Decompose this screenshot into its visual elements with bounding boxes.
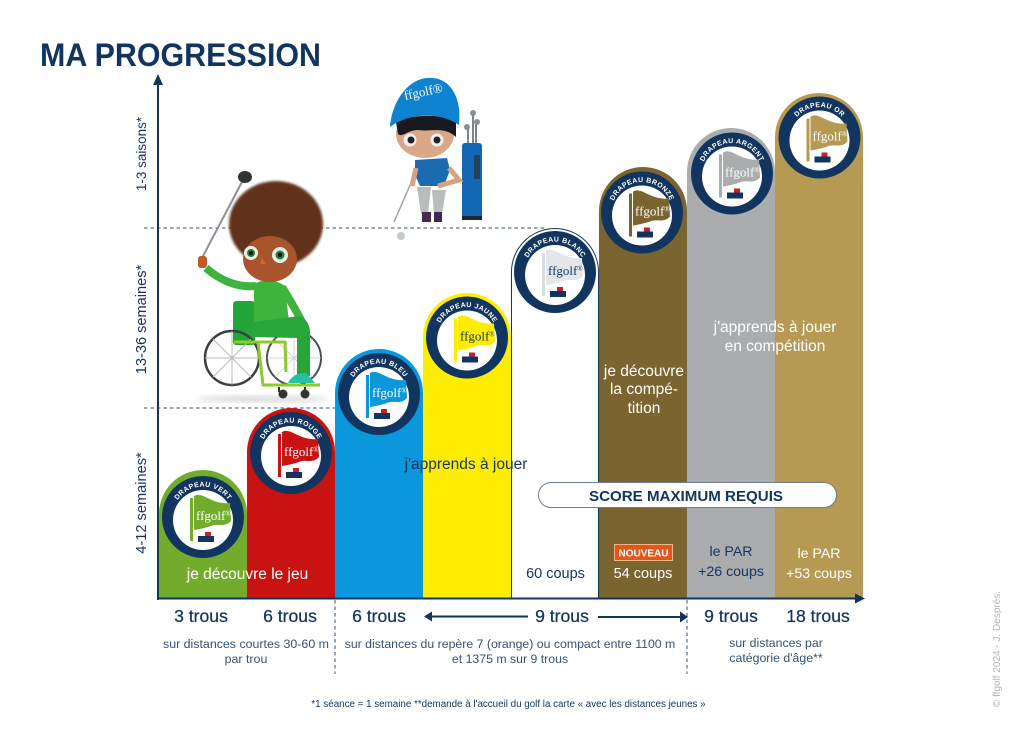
illustration: golfer in wheelchair [196,171,328,402]
ground shadow [196,396,328,402]
torso [415,158,450,186]
badge: drapeau argent [691,132,773,214]
note: distances par âge: sur distances par [729,636,823,650]
back cushion [233,301,255,345]
score: le PAR +26 coups: +26 coups [698,564,764,580]
bar: jaune [423,293,511,598]
holes: 18 trous: 18 trous [786,606,850,626]
badge: drapeau bleu: ® [401,387,407,395]
badge: drapeau rouge [250,412,332,494]
bar: vert [159,470,247,598]
holes: 6 trous: 6 trous [263,606,317,626]
holes: 9 trous with arrows [424,606,688,626]
note: distances repère 7: sur distances du repère 7 (orange) ou compact entre 1100 m [345,637,675,651]
bar: blanc [512,228,598,598]
hair [229,181,323,267]
far wheel [267,331,321,385]
badge: drapeau bronze: ® [664,206,670,214]
bar: bronze [599,167,687,598]
dashed level lines [144,228,687,674]
hand [198,256,207,268]
holes: 6 trous: 6 trous [352,606,406,626]
score: 60 coups: 60 coups [526,566,585,582]
legs [417,187,446,214]
bar: argent [687,128,775,598]
badge: drapeau vert: DRAPEAU VERT [174,482,232,500]
badge: drapeau blanc: ® [577,265,583,273]
club [202,180,243,258]
pill: score maximum requis [538,482,836,508]
badge: drapeau rouge: ffgolf [284,444,313,459]
footnote: *1 séance = 1 semaine **demande à l'accueil du golf la carte « avec les distances jeunes » [311,699,706,710]
badge: drapeau blanc [514,231,596,313]
holes: 9 trous: 9 trous [704,606,758,626]
score: le PAR +53 coups: le PAR [797,546,841,562]
axis label: 4-12 semaines: 4-12 semaines* [134,452,150,554]
note: distances par âge: catégorie d'âge** [729,651,823,665]
chair frame [234,342,320,385]
badge: drapeau or: ffgolf [812,128,842,144]
bar text: je découvre la compétition: la compé- [610,381,678,398]
badge: drapeau jaune: DRAPEAU JAUNE [436,302,498,323]
tag: nouveau [614,544,672,560]
bar text: je découvre la compétition: je découvre [603,363,684,380]
badge: drapeau jaune: ffgolf [460,328,489,344]
holes: 9 trous with arrows: 9 trous [535,606,589,626]
badge: drapeau or: ® [842,130,848,138]
bar: rouge [247,408,335,598]
putter [394,183,411,222]
note: distances courtes: sur distances courtes 30-60 m [163,637,329,651]
badge: drapeau vert: ffgolf [196,508,225,523]
pill: score maximum requis: SCORE MAXIMUM REQUIS [589,488,783,505]
badge: drapeau argent: DRAPEAU ARGENT [700,138,764,162]
badge: drapeau bronze: ffgolf [635,204,664,218]
score: le PAR +53 coups: +53 coups [786,566,852,582]
bar text: j'apprends à jouer en compétition: en compétition [725,338,825,355]
arm raised [206,268,256,286]
face [243,236,297,282]
bar text: j'apprends à jouer en compétition: j'apprends à jouer [713,319,836,336]
bar: bleu [335,349,423,598]
ball [397,232,405,240]
arms [412,168,459,186]
badge: drapeau jaune: ® [489,330,495,338]
note: distances repère 7: et 1375 m sur 9 trous [452,652,568,666]
illustration: golfer with cap and bag [323,78,482,240]
bar text: j'apprends à jouer: j'apprends à jouer [404,456,527,473]
arm right [282,287,302,322]
bar: or [775,93,863,598]
badge: drapeau or: DRAPEAU OR [794,102,844,117]
torso [254,280,289,322]
badge: drapeau jaune [426,296,508,378]
illustration: golfer with cap and bag: ffgolf® [403,80,444,103]
ground shadow [323,220,462,224]
badge: drapeau bleu [338,353,420,435]
badge: drapeau argent: ffgolf [725,164,754,180]
badge: drapeau argent: ® [754,166,760,174]
badge: drapeau bleu: DRAPEAU BLEU [350,358,408,377]
axes [153,74,865,604]
holes: 3 trous: 3 trous [174,606,228,626]
badge: drapeau rouge: ® [313,446,319,454]
title: MA PROGRESSION [40,37,321,73]
score: le PAR +26 coups: le PAR [709,544,753,560]
bar text: je découvre le jeu: je découvre le jeu [186,566,308,583]
badge: drapeau blanc: ffgolf [548,263,577,278]
shoe [288,373,315,383]
badge: drapeau vert [162,476,244,558]
badge: drapeau bronze [601,172,683,254]
score: 54 coups: 54 coups [614,566,672,582]
cap [390,78,460,127]
badge: drapeau bleu: ffgolf [372,385,401,400]
badge: drapeau blanc: DRAPEAU BLANC [524,236,586,258]
badge: drapeau or [778,96,860,178]
badge: drapeau vert: ® [225,510,231,518]
badge: drapeau bronze: DRAPEAU BRONZE [610,177,674,200]
head [396,110,454,158]
credit: © ffgolf 2024 - J. Després. [992,591,1003,707]
badge: drapeau rouge: DRAPEAU ROUGE [260,418,322,439]
note: distances courtes: par trou [225,652,267,666]
bar text: je découvre la compétition: tition [628,400,660,417]
axis label: 1-3 saisons: 1-3 saisons* [134,116,149,191]
thigh and shin [252,316,310,376]
golf bag [462,143,482,220]
tag: nouveau: NOUVEAU [618,548,669,560]
near wheel [205,331,259,385]
axis label: 13-36 semaines: 13-36 semaines* [134,264,150,374]
